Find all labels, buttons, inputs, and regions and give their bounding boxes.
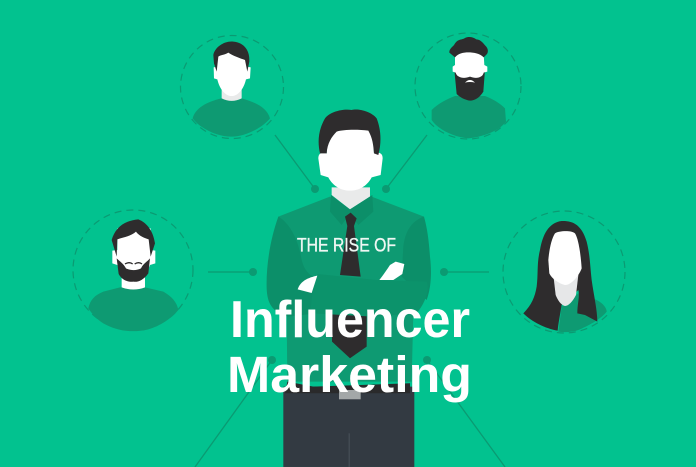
connector: left xyxy=(208,268,257,276)
necktie upper xyxy=(340,213,361,277)
necktie lower xyxy=(332,313,367,358)
left hand xyxy=(298,276,317,293)
left sleeve xyxy=(267,217,317,317)
influencer: top right bearded man xyxy=(415,33,521,139)
collar xyxy=(330,195,373,225)
connector: right xyxy=(440,268,489,276)
trousers xyxy=(283,387,414,467)
title: the rise of: THE RISE OF xyxy=(297,234,396,256)
influencer: left bearded man xyxy=(73,210,193,331)
shirt torso xyxy=(278,197,424,382)
connector: top left xyxy=(275,135,319,193)
neck xyxy=(332,187,370,209)
right hand xyxy=(379,262,404,280)
crossed forearm xyxy=(310,274,428,317)
connector: top right xyxy=(382,135,427,193)
influencer: right woman xyxy=(503,211,625,333)
title: influencer: Influencer xyxy=(230,291,470,349)
central figure: businessman xyxy=(267,109,431,467)
connector: bottom right xyxy=(423,356,505,467)
title: marketing: Marketing xyxy=(227,346,472,403)
belt xyxy=(285,382,410,399)
connector: bottom left xyxy=(195,356,276,467)
hair xyxy=(319,109,380,155)
influencer: top left man xyxy=(180,36,284,138)
face and ears xyxy=(318,123,383,191)
right sleeve xyxy=(402,217,431,300)
